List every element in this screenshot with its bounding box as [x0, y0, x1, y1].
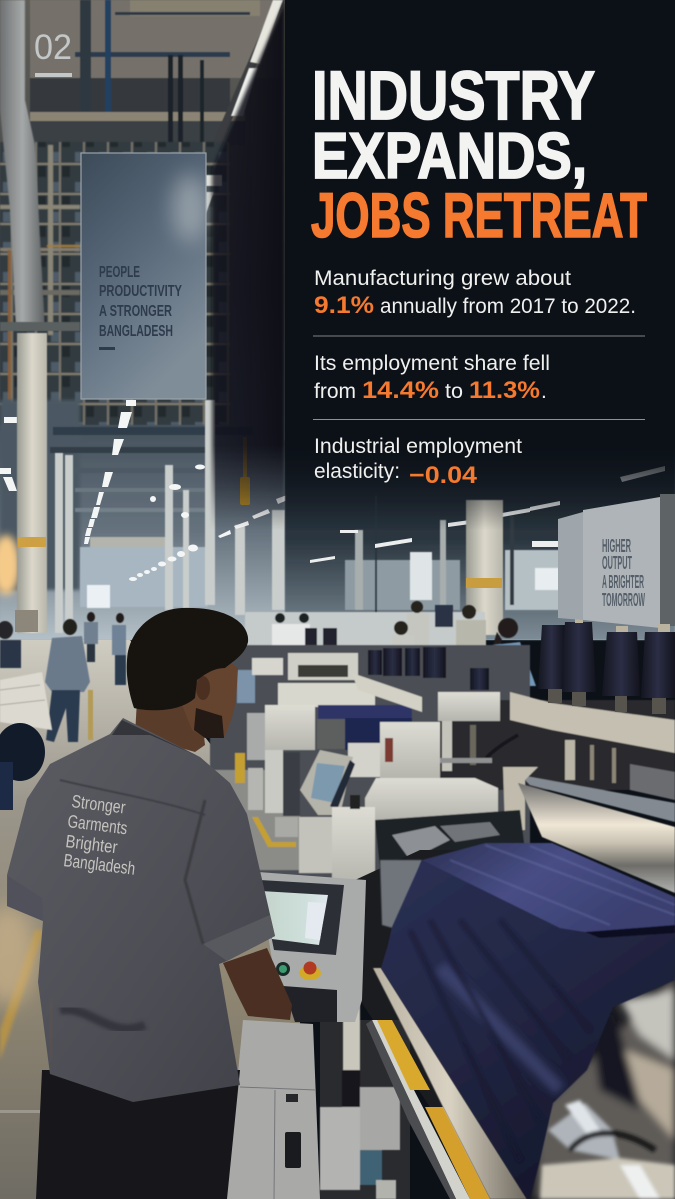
stat: employment elasticity: −0.04 — [409, 462, 478, 489]
headline — [311, 57, 647, 251]
stat: employment share — [314, 352, 550, 404]
navy fabric web — [381, 843, 675, 1199]
shirt back print: Garments — [67, 811, 129, 838]
hanging banner — [81, 153, 208, 399]
ceiling light dots — [0, 400, 297, 581]
stat: manufacturing growth: Manufacturing grew about — [314, 267, 571, 290]
control panel — [226, 872, 366, 1199]
rear beam — [510, 692, 675, 753]
machine row base colour — [210, 645, 530, 885]
stat: employment elasticity — [314, 435, 522, 489]
stat: employment share: 14.4% — [362, 377, 439, 404]
background workers and materials — [0, 612, 126, 810]
stat: manufacturing growth: 9.1% — [314, 292, 374, 319]
stat: employment share: . — [541, 380, 547, 403]
stat: manufacturing growth — [314, 267, 636, 319]
blurred machinery lower right — [535, 975, 675, 1199]
ceiling light strips — [205, 0, 283, 216]
roller stack — [375, 810, 525, 880]
banner text: PEOPLE — [99, 264, 140, 281]
back wall sign — [558, 494, 675, 628]
right hall beyond panel — [285, 440, 675, 640]
sign text: OUTPUT — [602, 553, 632, 573]
machine rows — [210, 601, 675, 893]
fabric bales — [0, 672, 52, 730]
pillar with yellow band — [466, 500, 503, 635]
shirt back print: Stronger — [71, 791, 127, 818]
shirt back print: Brighter — [65, 831, 119, 857]
stat: employment share: 11.3% — [469, 377, 540, 404]
front thread cones — [602, 624, 675, 698]
neck and head — [127, 608, 248, 752]
shirt back print: Bangladesh — [63, 850, 136, 879]
dark text panel — [212, 0, 675, 540]
banner text: BANGLADESH — [99, 323, 173, 340]
grey work shirt — [7, 718, 275, 1102]
worker: blue shirt woman — [488, 618, 536, 686]
tall thread cones — [538, 617, 666, 714]
stat: manufacturing growth: annually from 2017 to 2022. — [380, 295, 636, 318]
uprights and boxes — [320, 960, 400, 1199]
banner text: PRODUCTIVITY — [99, 283, 182, 300]
worker: grey shirt — [45, 619, 90, 742]
white front blocks — [365, 778, 498, 820]
bright roller — [540, 1100, 675, 1199]
small spools — [368, 650, 382, 675]
background photo: factory hall — [0, 0, 675, 640]
headline: EXPANDS, — [312, 119, 587, 192]
steel truss lattice — [0, 142, 230, 432]
warm glow at left — [0, 535, 20, 595]
ventilation duct — [0, 0, 80, 331]
far row workers — [245, 612, 485, 662]
banner text — [99, 264, 182, 350]
upper machine dark internals — [440, 700, 675, 790]
sign text — [602, 536, 645, 610]
large left column — [15, 333, 47, 633]
large machine foreground — [320, 843, 675, 1199]
page number: 02 — [34, 28, 72, 67]
shirt back print — [63, 791, 136, 879]
yellow strip — [377, 1020, 430, 1090]
bracket — [503, 767, 538, 830]
mid hall ceiling and lights — [0, 400, 332, 640]
trousers — [36, 1070, 240, 1199]
foreground worker — [7, 608, 292, 1199]
headline: INDUSTRY — [312, 57, 595, 134]
stat: employment elasticity: Industrial employment — [314, 435, 522, 458]
distant columns — [55, 400, 332, 633]
console cabinet — [226, 1020, 320, 1199]
lower rail — [372, 1020, 470, 1199]
forearm — [223, 948, 292, 1020]
stat: employment share: to — [445, 380, 463, 403]
silver rail — [373, 968, 527, 1199]
steel rollers — [518, 783, 675, 893]
dark fabric roll — [0, 723, 45, 781]
stat: employment share: from — [314, 380, 356, 403]
stat: employment share: Its employment share fell — [314, 352, 550, 375]
stat: employment elasticity: elasticity: — [314, 460, 400, 483]
banner text: A STRONGER — [99, 303, 172, 320]
factory floor — [0, 640, 300, 1199]
sign text: HIGHER — [602, 536, 631, 556]
